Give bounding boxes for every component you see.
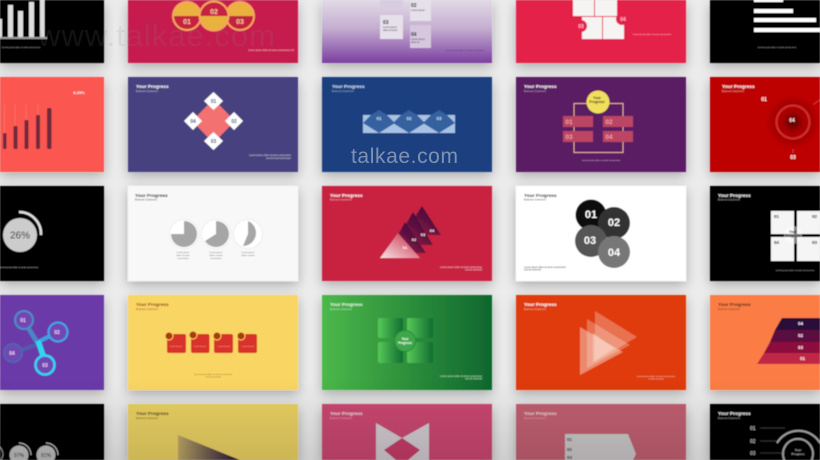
card 03 [380, 15, 403, 39]
node 03 [204, 132, 223, 150]
panel: pink cards [516, 0, 686, 63]
panel: dusty rose ribbon [516, 404, 686, 460]
card numbers [774, 214, 818, 245]
caption [637, 375, 675, 380]
subtitle: Business Customers [524, 198, 547, 202]
caption: Lorem ipsum dolor sit amet consectetur [2, 46, 40, 49]
caption: sed do eiusmod [205, 376, 222, 378]
card 04 [410, 25, 431, 48]
panel: indigo diamond [128, 77, 298, 172]
caption: sed do eiusmod [524, 268, 542, 272]
node 04: 04 [190, 119, 196, 125]
panel: yellow red cards [128, 295, 298, 390]
caption [194, 373, 232, 378]
card 02: Lorem ipsum [411, 9, 425, 12]
caption: Lorem ipsum dolor sit amet consectetur [440, 375, 482, 378]
pie labels: dolor sit amet [241, 254, 255, 257]
title: Your Progress [330, 302, 363, 308]
label 01: 01 [565, 119, 573, 126]
panel: red triangles [322, 186, 492, 281]
grid lines [4, 104, 38, 133]
badge 03 [575, 20, 587, 32]
badge 03: 03 [578, 24, 584, 30]
caption: Lorem ipsum dolor sit amet consectetur [758, 46, 796, 49]
pie labels: consectetur [177, 257, 189, 260]
card 4 [237, 332, 257, 353]
ribbon labels: 03 [567, 455, 573, 460]
label 03: 03 [565, 134, 573, 141]
centre circle: Progress [398, 341, 412, 345]
card 04: dolor sit [411, 41, 420, 44]
label 04: 04 [789, 118, 795, 124]
caption: Lorem ipsum dolor sit amet consectetur [524, 266, 566, 269]
arms [15, 326, 52, 358]
ring label [791, 448, 805, 456]
circle 01: 01 [585, 209, 597, 221]
card numbers: 02 [812, 214, 818, 219]
ribbon labels [567, 437, 573, 460]
panel: crimson three circles [128, 0, 298, 63]
node 02: 02 [406, 116, 412, 121]
gauge circle [3, 218, 37, 252]
pie 2 [202, 220, 230, 248]
cards [573, 0, 624, 39]
subtitle: Business Customers [718, 308, 741, 311]
leader lines [760, 428, 785, 453]
partial ring [0, 447, 3, 460]
yellow badge [586, 90, 610, 114]
caption: sed do eiusmod [648, 378, 665, 380]
connectors [776, 100, 820, 153]
circle 03: 03 [584, 235, 596, 247]
panel: orange play triangles [516, 295, 686, 390]
circle 01: 01 [183, 19, 191, 26]
card 04: Lorem ipsum [411, 38, 425, 41]
watermark: talkae.com: talkae.com [351, 145, 459, 168]
gauge arc [19, 212, 41, 235]
title: Your Progress [718, 302, 751, 308]
circle 02 [198, 0, 230, 32]
label 04: 04 [605, 134, 613, 141]
node 03: 03 [211, 139, 216, 145]
title: Your Progress [524, 302, 557, 308]
ring 91%: 91% [41, 453, 52, 459]
subtitle: Business Customers [718, 198, 741, 202]
pie labels [176, 251, 255, 260]
caption [440, 375, 483, 380]
panel: black quadrant cards [710, 186, 820, 281]
subtitle: Business Customers [330, 417, 353, 420]
node 01 [363, 110, 395, 133]
circle 01 [172, 1, 202, 31]
panel: black percent rings [0, 404, 104, 460]
title: Your Progress [524, 411, 557, 417]
rings [777, 431, 820, 460]
card 03: 03 [383, 20, 389, 26]
yellow badge: Your [593, 96, 601, 100]
title: Your Progress [524, 84, 557, 90]
panel: purple gradient cards [322, 0, 492, 63]
label 01: 01 [761, 97, 767, 103]
pyramid labels: 02 [798, 333, 804, 338]
pyramid labels: 04 [798, 321, 804, 326]
card 4: Lorem ipsum [242, 345, 254, 348]
watermark: www.talkae.com: www.talkae.com [37, 18, 276, 53]
node 04 [184, 112, 202, 130]
pyramid labels: 03 [798, 345, 804, 350]
pie 3 [234, 220, 262, 248]
panel: violet hub diagram [0, 295, 104, 390]
triangle 04 [403, 206, 441, 235]
badge 04: 04 [620, 17, 626, 23]
panel: orange pyramid [710, 295, 820, 390]
light band [363, 115, 455, 133]
pie labels: consectetur [210, 257, 222, 260]
bottom vignette [0, 380, 820, 460]
circle 02 [598, 207, 630, 239]
card 02 [410, 0, 431, 21]
label 01 [563, 116, 593, 127]
title: Your Progress [136, 302, 169, 308]
node 01: 01 [376, 116, 382, 121]
card 2 [189, 331, 210, 353]
subtitle: Business Customers [136, 308, 159, 311]
card numbers: 04 [774, 240, 780, 245]
caption [440, 266, 483, 272]
card 2: Lorem ipsum [194, 345, 206, 348]
title: Your Progress [722, 84, 755, 90]
subtitle: Business Customers [136, 90, 159, 93]
caption: sed do eiusmod [465, 378, 483, 380]
subtitle: Business Customers [330, 308, 353, 311]
caption: Lorem ipsum dolor sit amet consectetur [194, 373, 232, 376]
subtitle: Business Customers [332, 90, 355, 93]
circle 01 [576, 200, 606, 230]
ring 97%: 97% [14, 453, 25, 459]
labels: 01 [750, 426, 756, 432]
card 03: dolor sit amet [383, 29, 398, 32]
centre circle: Your [401, 337, 409, 341]
caption: Lorem ipsum dolor sit amet consectetur [582, 159, 620, 162]
subtitle: Business Customers [722, 90, 745, 93]
card 02: 02 [411, 3, 417, 9]
pyramid [757, 318, 820, 364]
panel: white pie charts [128, 186, 298, 281]
badge 04 [616, 13, 628, 25]
panel: black concentric rings [710, 404, 820, 460]
triangle 01: 01 [403, 245, 408, 250]
card 01 [380, 0, 403, 10]
label 03: 03 [790, 155, 796, 161]
node 03: 03 [436, 116, 442, 121]
subtitle: Business Customers [524, 417, 547, 420]
label 03 [563, 131, 593, 142]
node 01: 01 [20, 318, 26, 324]
centre label [784, 226, 802, 244]
labels: 02 [750, 439, 756, 445]
card 1 [165, 332, 186, 353]
panel: black progress bars [710, 0, 820, 63]
circle 03 [225, 1, 255, 31]
pie labels: dolor sit amet [176, 254, 190, 257]
caption: Lorem ipsum dolor sit amet consectetur [440, 266, 482, 269]
circle 04 [598, 236, 630, 268]
node 02: 02 [231, 119, 237, 125]
ribbon card [565, 434, 636, 460]
subtitle: Business Customers [330, 198, 353, 202]
panel: black 26% gauge [0, 186, 104, 281]
centre label: Progress [785, 234, 801, 238]
caption: sed do eiusmod tempor [266, 157, 291, 160]
pyramid labels [798, 321, 806, 361]
title: Your Progress [524, 193, 557, 199]
triangle 03 [394, 212, 433, 245]
triangle 03: 03 [421, 232, 426, 237]
centre diamond [384, 438, 420, 460]
card numbers: 01 [774, 214, 780, 219]
subtitle: Business Customers [524, 308, 547, 311]
centre label: Your [789, 230, 797, 234]
yellow badge: Progress [589, 100, 605, 104]
triangle 02 [388, 222, 426, 253]
ring label: Progress [791, 452, 805, 456]
subtitle: Business Customers [718, 417, 741, 420]
ribbon labels: 02 [567, 447, 573, 452]
node 03: 03 [42, 363, 48, 369]
radial rings [766, 95, 820, 149]
triangles [580, 311, 637, 375]
card 1: Lorem ipsum [170, 345, 182, 348]
node 02 [225, 112, 243, 130]
labels [750, 426, 756, 457]
label 02: 02 [605, 119, 613, 126]
label 02 [603, 116, 633, 127]
card 04: 04 [411, 32, 417, 38]
caption: Lorem ipsum dolor sit amet consectetur [637, 375, 675, 378]
title: Your Progress [718, 193, 751, 199]
card numbers: 03 [812, 240, 818, 245]
pie 1 [170, 220, 198, 248]
caption [249, 154, 291, 160]
panel: mustard triangle [128, 404, 298, 460]
label 04 [603, 131, 633, 142]
title: Your Progress [135, 193, 168, 199]
progress bars [754, 0, 820, 32]
node 01: 01 [211, 99, 216, 105]
bars [3, 108, 52, 149]
title: Your Progress [332, 84, 365, 90]
pyramid labels: 01 [800, 356, 806, 361]
subtitle: Business Customers [524, 90, 547, 93]
node 04: 04 [9, 351, 15, 357]
pie labels: Lorem ipsum [242, 251, 254, 254]
triangle 02: 02 [412, 237, 417, 242]
ribbon labels: 01 [567, 437, 573, 442]
title: Your Progress [330, 411, 363, 417]
caption: Lorem ipsum dolor sit amet consectetur [776, 269, 814, 272]
caption [524, 266, 566, 272]
title: Your Progress [330, 193, 363, 199]
panel: plum flow chart [516, 77, 686, 172]
title: Your Progress [136, 84, 169, 90]
circle 03: 03 [236, 19, 244, 26]
circle 02: 02 [210, 9, 218, 16]
bowtie [376, 423, 429, 460]
triangle 04: 04 [430, 228, 435, 233]
bar chart [0, 0, 47, 39]
quadrant cards [771, 211, 820, 261]
gradient triangle [178, 435, 240, 460]
circle 02: 02 [608, 217, 620, 229]
panel: green cards [322, 295, 492, 390]
caption: Lorem ipsum dolor sit amet consectetur elit [248, 49, 294, 52]
triangle 01 [380, 233, 420, 258]
card 3 [213, 332, 233, 353]
panel: red radial [710, 77, 820, 172]
caption: Lorem ipsum dolor sit amet consectetur [0, 266, 38, 269]
pie labels: Lorem ipsum [177, 251, 189, 254]
card 3: Lorem ipsum [218, 345, 230, 348]
card 03: Lorem ipsum [383, 26, 397, 29]
frame [574, 104, 623, 152]
panel: black bar chart slide [0, 0, 104, 63]
node 01 [204, 92, 223, 110]
caption: sed do eiusmod [465, 268, 483, 272]
subtitle: Business Customers [135, 198, 158, 202]
node 02: 02 [54, 330, 60, 336]
panel: navy hexagons [322, 77, 492, 172]
circle 04: 04 [608, 247, 621, 259]
panel: rose bowtie [322, 404, 492, 460]
pie labels: Lorem ipsum [210, 251, 222, 254]
circle 03 [575, 225, 607, 257]
diamond [192, 99, 235, 143]
subtitle: Business Customers [136, 417, 159, 420]
centre circle [394, 330, 416, 352]
node 02 [393, 110, 425, 133]
caption: Lorem ipsum dolor sit amet consectetur [633, 33, 671, 36]
gauge value: 26% [10, 230, 30, 242]
labels: 03 [750, 451, 756, 457]
title: Your Progress [136, 411, 169, 417]
pie labels: dolor sit amet [209, 254, 223, 257]
caption: Lorem ipsum dolor sit amet consectetur [446, 49, 484, 52]
cards [378, 318, 433, 363]
title: Your Progress [718, 411, 751, 417]
ring label: Your [795, 448, 802, 452]
caption: Lorem ipsum dolor sit amet consectetur [249, 154, 291, 157]
panel: coral bar chart [0, 77, 104, 172]
node 03 [423, 110, 455, 133]
panel: white overlapping circles [516, 186, 686, 281]
value label: 6.25% [73, 90, 85, 95]
